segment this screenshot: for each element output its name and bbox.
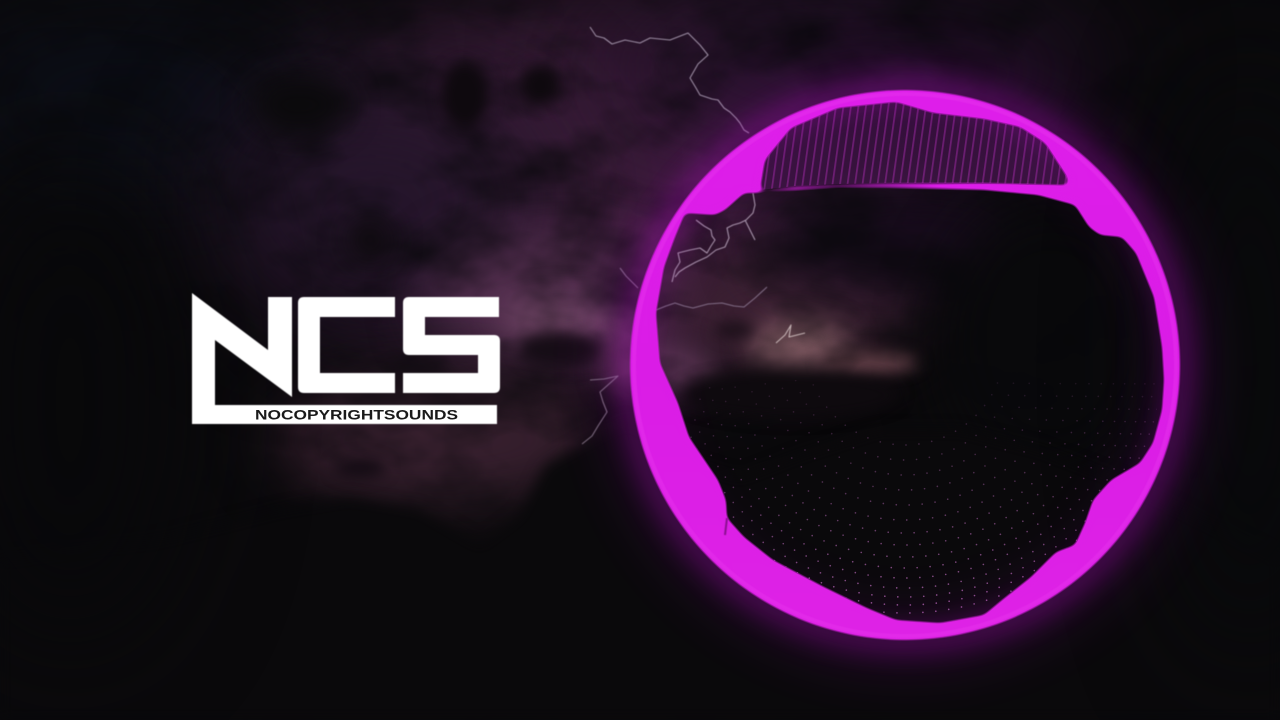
logo letter S (403, 297, 500, 393)
dot-matrix waveform (lower) (690, 380, 1157, 614)
logo tagline: NOCOPYRIGHTSOUNDS (255, 406, 458, 422)
upper waveform lens with striped dots (761, 102, 1068, 190)
logo: NCS (192, 293, 500, 424)
logo letter N with base bar (192, 293, 497, 424)
black lower cloud mass (0, 420, 1280, 720)
logo letter C (298, 297, 395, 393)
dark cloud patches (250, 61, 900, 478)
ring lighter sheen (634, 94, 1176, 636)
audio spectrum ring (630, 90, 1180, 640)
lightning bolts (582, 27, 805, 444)
ring outer glow (627, 87, 1183, 643)
